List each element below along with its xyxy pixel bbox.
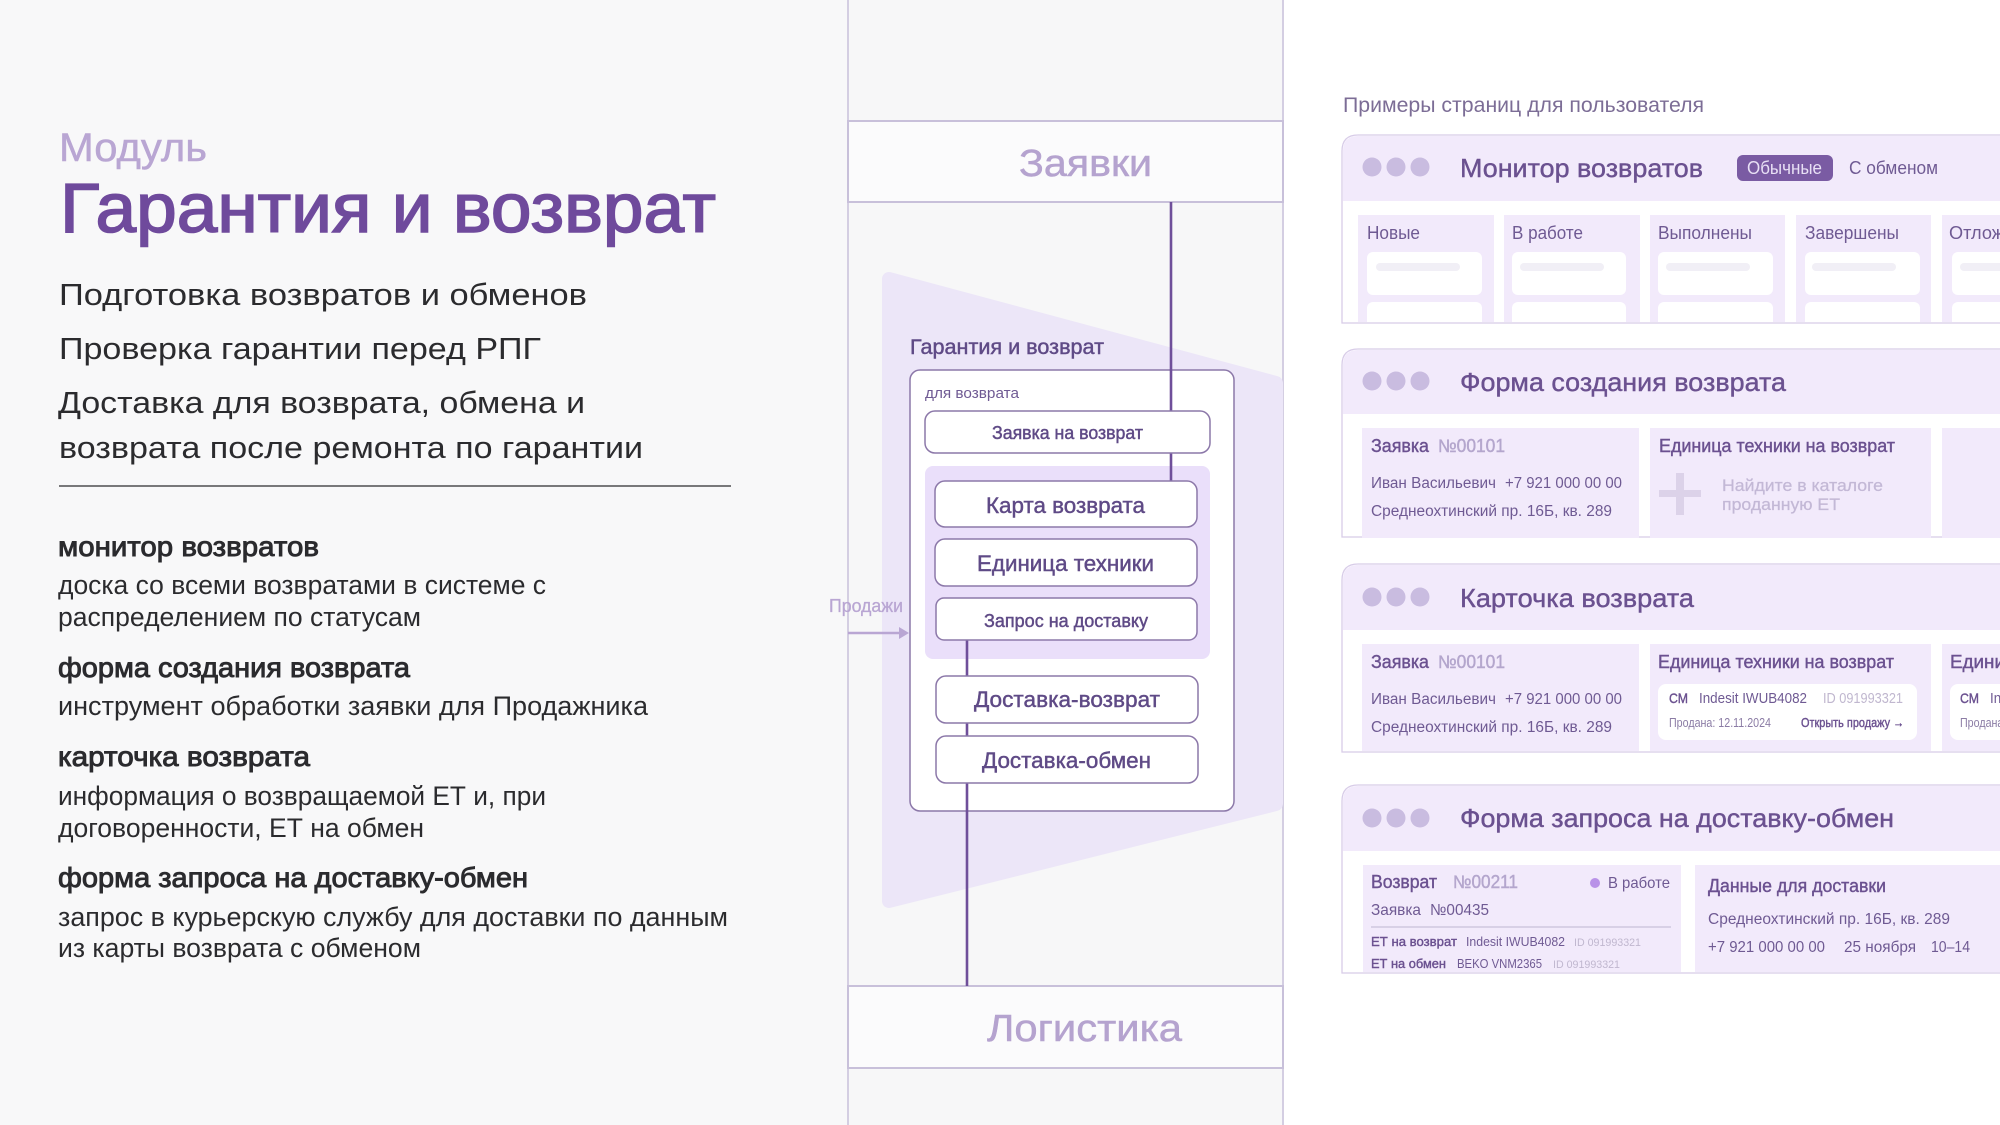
text block: key functions: Подготовка возвратов и обменов <box>59 277 587 312</box>
box: return request <box>925 411 1210 453</box>
text block: return card description: договоренности, ЕТ на обмен <box>58 813 424 843</box>
arrow: sales input <box>829 596 909 639</box>
column: in progress: В работе <box>1512 223 1583 243</box>
text block: monitor description: доска со всеми возвратами в системе с <box>58 570 546 600</box>
panel title: Форма создания возврата <box>1460 367 1787 397</box>
text block: delivery form description <box>58 862 728 963</box>
block: request details: Среднеохтинский пр. 16Б, кв. 289 <box>1371 719 1612 736</box>
block: request details: Иван Васильевич <box>1371 475 1496 492</box>
diagram heading: Гарантия и возврат <box>910 336 1104 359</box>
block: request details: Среднеохтинский пр. 16Б, кв. 289 <box>1371 503 1612 520</box>
status dot <box>1590 878 1600 888</box>
arrow: sales input: Продажи <box>829 596 903 616</box>
block: return summary <box>1363 865 1681 972</box>
block: returned equipment: Единица техники на возврат <box>1658 652 1894 672</box>
panel: delivery exchange request form <box>1342 785 2000 973</box>
band: requests <box>848 121 1283 202</box>
eyebrow: module: Модуль <box>59 126 207 170</box>
equipment card: Indesit IWUB4082 <box>1699 691 1807 707</box>
band: requests: Заявки <box>1019 143 1152 185</box>
block: returned equipment <box>1650 644 1931 751</box>
window dots <box>1362 588 1430 606</box>
equipment card: СМ <box>1669 690 1688 706</box>
label: for return: для возврата <box>925 385 1020 402</box>
block: return summary: №00435 <box>1430 902 1489 919</box>
block: return summary: ЕТ на обмен <box>1371 956 1446 971</box>
funnel background <box>889 279 1276 901</box>
window dots <box>1362 372 1430 390</box>
text block: key functions <box>58 277 643 465</box>
highlighted group background <box>925 466 1210 659</box>
panel: process diagram <box>829 121 1283 1068</box>
column: in progress <box>1504 215 1640 322</box>
text block: key functions: возврата после ремонта по гарантии <box>59 430 643 465</box>
panel: return creation form <box>1342 349 2000 538</box>
block: equipment search: Единица техники на возврат <box>1659 436 1895 456</box>
panel title: Форма запроса на доставку-обмен <box>1460 803 1894 833</box>
tab: with exchange: С обменом <box>1849 158 1938 178</box>
text block: return card description <box>58 741 546 843</box>
icon: plus <box>1659 473 1701 515</box>
text block: key functions: Проверка гарантии перед РПГ <box>59 331 541 366</box>
column: done: Выполнены <box>1658 223 1752 243</box>
block: return summary: ID 091993321 <box>1574 937 1641 949</box>
equipment card: Открыть продажу → <box>1801 716 1904 730</box>
column: postponed <box>1942 215 2000 322</box>
block: delivery data: 25 ноября <box>1844 939 1916 956</box>
text block: return card description: карточка возврата <box>58 741 310 772</box>
connector: requests to return card <box>1170 202 1172 481</box>
block: return summary: Возврат <box>1371 872 1437 892</box>
block: request details: Заявка <box>1371 436 1430 456</box>
block: return summary: Заявка <box>1371 902 1421 919</box>
column: new <box>1358 215 1494 322</box>
window dots <box>1362 808 1430 828</box>
box: delivery exchange: Доставка-обмен <box>982 748 1151 773</box>
block: return summary: BEKO VNM2365 <box>1457 956 1542 971</box>
heading: user page examples: Примеры страниц для пользователя <box>1343 93 1704 117</box>
text block: delivery form description: запрос в курьерскую службу для доставки по данным <box>58 902 728 932</box>
column: completed <box>1796 215 1931 322</box>
block: request details: №00101 <box>1438 652 1505 672</box>
block: request details: +7 921 000 00 00 <box>1505 475 1622 492</box>
panel title: Монитор возвратов <box>1460 153 1703 183</box>
box: return card <box>935 481 1197 527</box>
block: delivery data <box>1695 865 2000 972</box>
block: equipment search <box>1650 428 1931 538</box>
equipment card <box>1658 684 1917 740</box>
panel: module description <box>58 126 731 963</box>
connector: delivery to logistics <box>966 640 968 986</box>
column: completed: Завершены <box>1805 223 1899 243</box>
box: return card: Карта возврата <box>986 493 1146 518</box>
text block: key functions: Доставка для возврата, обмена и <box>58 385 585 420</box>
panel: return card <box>1342 564 2000 752</box>
box: delivery request <box>936 598 1197 640</box>
block: return summary: ID 091993321 <box>1553 959 1620 971</box>
panel title: Карточка возврата <box>1460 583 1695 613</box>
text block: monitor description: монитор возвратов <box>58 531 319 562</box>
text block: monitor description <box>58 531 546 632</box>
block: equipment search: Найдите в каталоге <box>1722 476 1883 495</box>
text block: monitor description: распределением по статусам <box>58 602 421 632</box>
text block: delivery form description: из карты возврата с обменом <box>58 933 421 963</box>
block: equipment search: проданную ЕТ <box>1722 495 1840 514</box>
block: request details: +7 921 000 00 00 <box>1505 691 1622 708</box>
text block: creation form description: инструмент обработки заявки для Продажника <box>58 691 649 721</box>
tab: regular: Обычные <box>1747 158 1822 178</box>
block: return summary: Indesit IWUB4082 <box>1466 934 1565 949</box>
panel: returns monitor <box>1342 135 2000 323</box>
equipment card: ID 091993321 <box>1823 691 1903 707</box>
text block: return card description: информация о возвращаемой ЕТ и, при <box>58 781 546 811</box>
block: return summary: №00211 <box>1453 872 1518 892</box>
text block: delivery form description: форма запроса на доставку-обмен <box>58 862 528 893</box>
tab: regular <box>1737 155 1833 181</box>
block: request details: №00101 <box>1438 436 1505 456</box>
box: return request: Заявка на возврат <box>992 423 1143 443</box>
title: Гарантия и возврат <box>60 169 716 247</box>
block: delivery data: Данные для доставки <box>1708 876 1886 896</box>
equipment card: Продана: 12.11.2024 <box>1669 716 1771 730</box>
band: logistics: Логистика <box>987 1008 1183 1050</box>
block: request details: Иван Васильевич <box>1371 691 1496 708</box>
box: delivery request: Запрос на доставку <box>984 611 1148 631</box>
block: exchange equipment <box>1942 644 2000 751</box>
block: return summary: В работе <box>1608 875 1670 892</box>
band: logistics <box>848 986 1283 1068</box>
text block: creation form description: форма создания возврата <box>58 652 410 683</box>
text block: creation form description <box>58 652 649 721</box>
box: equipment unit <box>935 539 1197 586</box>
block: request details: Заявка <box>1371 652 1430 672</box>
box: equipment unit: Единица техники <box>977 551 1154 576</box>
module container <box>910 370 1234 811</box>
box: delivery exchange <box>936 736 1198 783</box>
column: new: Новые <box>1367 223 1420 243</box>
column: done <box>1650 215 1785 322</box>
block: return summary: ЕТ на возврат <box>1371 934 1457 949</box>
block: empty third column <box>1942 428 2000 538</box>
box: delivery return <box>936 676 1198 723</box>
block: request details <box>1362 428 1639 538</box>
block: delivery data: +7 921 000 00 00 <box>1708 939 1825 956</box>
window dots <box>1362 158 1430 176</box>
block: delivery data: Среднеохтинский пр. 16Б, кв. 289 <box>1708 911 1950 928</box>
box: delivery return: Доставка-возврат <box>974 687 1160 712</box>
block: delivery data: 10–14 <box>1931 939 1970 956</box>
block: exchange equipment: СМ <box>1960 690 1979 706</box>
block: request details <box>1362 644 1639 751</box>
